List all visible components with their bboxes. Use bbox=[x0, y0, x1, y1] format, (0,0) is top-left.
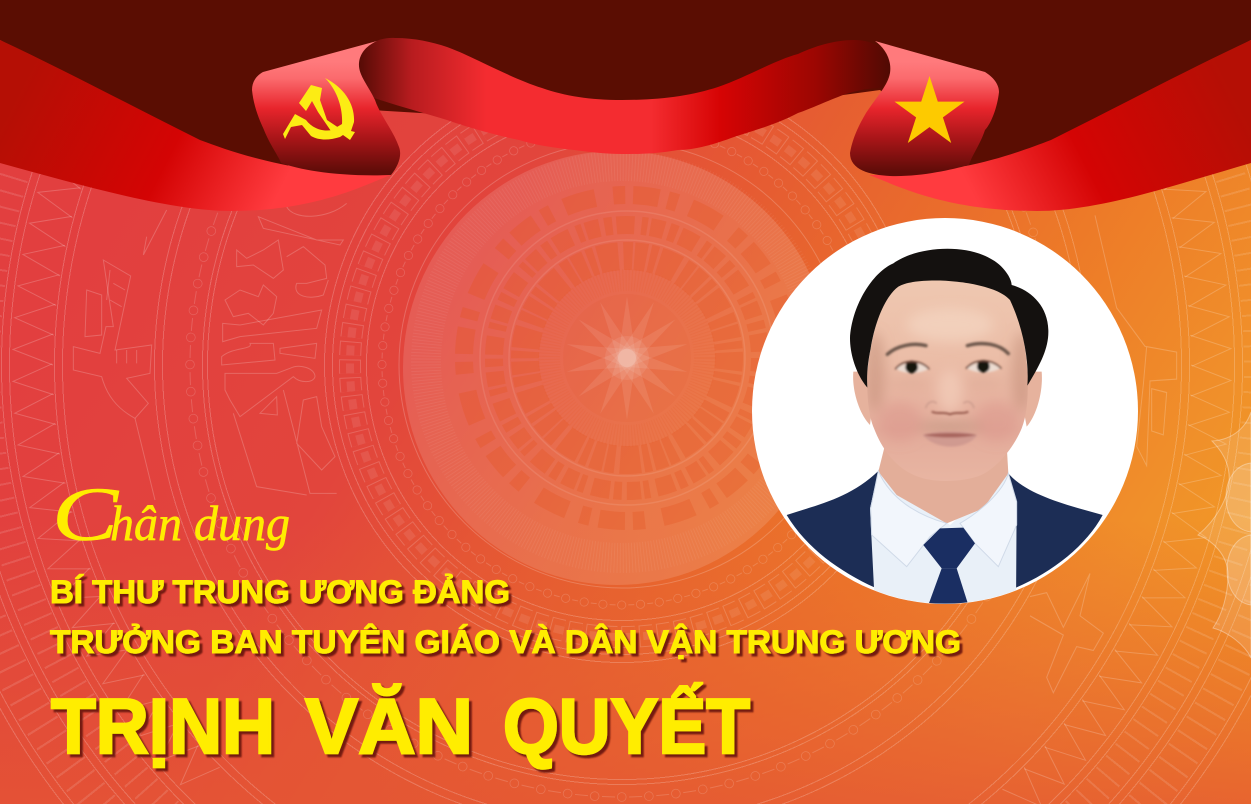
ribbon: right bbox=[869, 40, 1251, 211]
face shading bbox=[865, 308, 1032, 442]
portrait: white circle with illustrated photo bbox=[752, 218, 1138, 608]
text: position line 1: BÍ THƯ TRUNG ƯƠNG ĐẢNG bbox=[50, 574, 510, 610]
background: right bird line motifs bbox=[1030, 215, 1177, 693]
ribbon fold: left with hammer and sickle bbox=[252, 41, 400, 175]
nose bbox=[926, 402, 974, 414]
suit jacket bbox=[787, 471, 1103, 588]
icon: hammer and sickle bbox=[283, 78, 355, 140]
eyes bbox=[895, 360, 1001, 373]
shirt bbox=[870, 471, 1017, 608]
text: script title: hân dung bbox=[110, 495, 290, 551]
tie bbox=[923, 528, 975, 605]
hair bbox=[850, 249, 1048, 388]
text: name: VĂN bbox=[305, 682, 473, 770]
background: meander and chain bands bbox=[185, 124, 1038, 802]
text: position line 2: TRƯỞNG BAN TUYÊN GIÁO VÀ DÂN VẬN TRUNG ƯƠNG bbox=[50, 624, 961, 660]
background: central bronze drum medallion bbox=[403, 151, 831, 585]
text block: headline bbox=[50, 473, 961, 770]
text: name: TRỊNH bbox=[51, 682, 275, 770]
mouth bbox=[923, 431, 977, 447]
neck bbox=[878, 445, 1008, 523]
ribbon: left bbox=[0, 40, 391, 211]
text: script title: C bbox=[52, 473, 120, 557]
ribbon: centre wave bbox=[359, 38, 890, 154]
text: name bbox=[51, 682, 750, 770]
ears bbox=[853, 372, 1042, 427]
text: script title bbox=[52, 473, 290, 557]
eyebrows bbox=[887, 344, 1008, 354]
text: name: QUYẾT bbox=[503, 682, 750, 770]
icon: yellow star bbox=[894, 76, 964, 143]
face bbox=[867, 278, 1028, 481]
decorative light flower at right edge bbox=[1198, 412, 1251, 658]
dark maroon top band bbox=[0, 0, 1251, 170]
background: outer patterned bands bbox=[0, 172, 1251, 804]
ribbon fold: right with star bbox=[850, 41, 999, 176]
background: left bird and boat line motifs bbox=[73, 203, 347, 500]
collar bbox=[871, 471, 1017, 567]
